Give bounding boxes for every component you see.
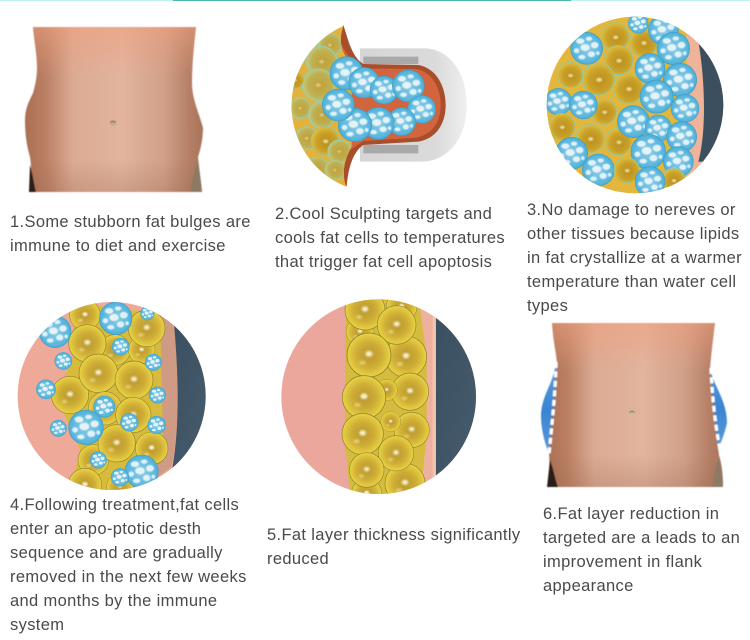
applicator head <box>360 48 467 162</box>
frozen cells <box>322 57 436 142</box>
caption 4: enter an apo-ptotic desth <box>10 520 201 538</box>
caption 2: that trigger fat cell apoptosis <box>275 253 492 271</box>
caption 6: 6.Fat layer reduction in <box>543 505 719 523</box>
caption 4: and months by the immune <box>10 592 217 610</box>
fat cell wedge <box>292 26 352 187</box>
caption 3: in fat crystallize at a warmer <box>527 249 742 267</box>
caption 1: immune to diet and exercise <box>10 237 226 255</box>
icon: navel <box>628 410 636 416</box>
caption 6: targeted are a leads to an <box>543 529 740 547</box>
caption 3: types <box>527 297 568 315</box>
panel 2: applicator cooling fat <box>286 25 467 187</box>
caption 4: sequence and are gradually <box>10 544 223 562</box>
panel 3: lipids crystallize <box>543 13 727 197</box>
dashed flank lines <box>549 362 556 454</box>
caption 6 <box>543 505 740 595</box>
caption 2: cools fat cells to temperatures <box>275 229 505 247</box>
caption 5: 5.Fat layer thickness significantly <box>267 526 520 544</box>
caption 6: appearance <box>543 577 634 595</box>
caption 3: other tissues because lipids <box>527 225 740 243</box>
skin fold <box>333 25 446 187</box>
caption 3: 3.No damage to nereves or <box>527 201 736 219</box>
caption 5 <box>267 526 520 568</box>
panel 4: apoptotic fat cells <box>17 300 210 502</box>
left flank reduction <box>541 368 560 455</box>
caption 1: 1.Some stubborn fat bulges are <box>10 213 251 231</box>
panel 1: torso before treatment <box>25 27 203 192</box>
icon: navel <box>110 120 116 126</box>
torso <box>547 323 723 487</box>
caption 3 <box>527 201 742 315</box>
caption 2 <box>275 205 505 271</box>
caption 4: removed in the next few weeks <box>10 568 247 586</box>
caption 5: reduced <box>267 550 329 568</box>
caption 4: system <box>10 616 64 634</box>
caption 4: 4.Following treatment,fat cells <box>10 496 239 514</box>
top accent bar <box>0 0 750 1</box>
caption 4 <box>10 496 247 634</box>
panel 6: torso after treatment <box>541 323 727 487</box>
caption 6: improvement in flank <box>543 553 702 571</box>
right flank reduction <box>705 368 727 447</box>
caption 3: temperature than water cell <box>527 273 736 291</box>
caption 1 <box>10 213 251 255</box>
caption 2: 2.Cool Sculpting targets and <box>275 205 492 223</box>
panel 5: reduced fat layer <box>281 299 476 494</box>
